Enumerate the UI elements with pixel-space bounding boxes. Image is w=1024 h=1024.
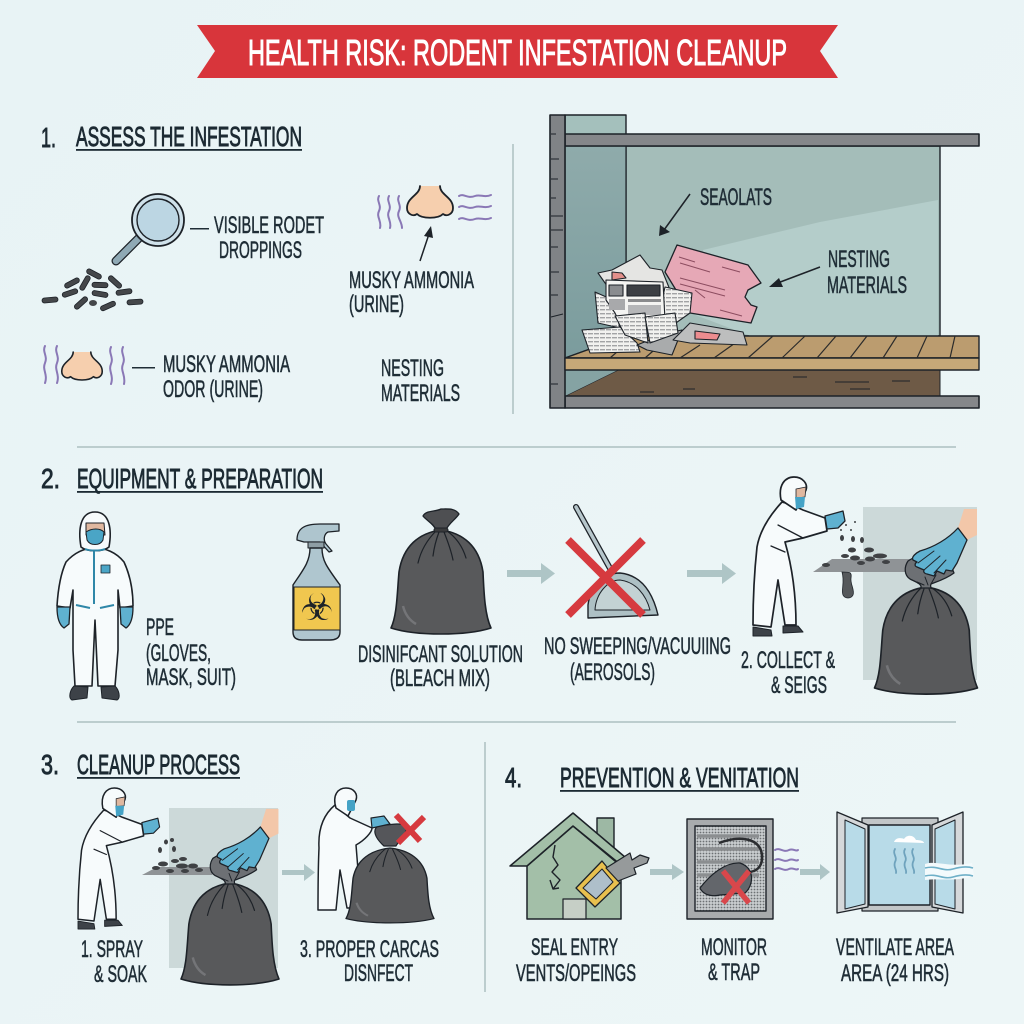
label: nesting materials: NESTING	[381, 355, 444, 382]
newspaper pile	[582, 255, 747, 355]
label: nesting materials: MATERIALS	[381, 380, 460, 407]
heading: assess the infestation	[41, 121, 302, 153]
label: visible droppings: VISIBLE RODET	[214, 212, 324, 239]
icon: house with cracks and sealing	[510, 813, 649, 919]
heading: prevention and ventilation	[505, 762, 799, 793]
label: proper carcass disinfect	[300, 936, 439, 987]
label: spray and soak	[81, 936, 147, 988]
icon: crossed-out dustpan	[568, 507, 658, 618]
label: ventilate area: AREA (24 HRS)	[841, 960, 949, 987]
label: monitor and trap: & TRAP	[708, 959, 760, 986]
label: PPE: MASK, SUIT)	[146, 664, 236, 691]
arrow: to nose	[420, 226, 433, 261]
label: visible droppings	[190, 212, 324, 264]
label: sealants with arrow	[659, 184, 772, 236]
wall and beams	[550, 115, 979, 408]
label: musky ammonia odor: MUSKY AMMONIA	[163, 351, 290, 378]
label: musky ammonia odor	[132, 351, 290, 403]
label: musky ammonia urine: MUSKY AMMONIA	[349, 267, 474, 294]
label: PPE: (GLOVES,	[146, 640, 211, 667]
label: musky ammonia urine: (URINE)	[349, 291, 404, 318]
icon: rat in trap cage	[687, 819, 773, 919]
arrow: spray to disposal	[282, 864, 315, 881]
arrow: house to trap	[650, 864, 684, 880]
label: musky ammonia odor: ODOR (URINE)	[163, 376, 263, 403]
heading: cleanup process: CLEANUP PROCESS	[77, 749, 240, 780]
label: no sweeping: (AEROSOLS)	[570, 659, 655, 686]
title banner	[197, 25, 838, 78]
label: monitor and trap	[701, 934, 767, 986]
illustration: collect droppings into bag	[753, 477, 978, 694]
heading: assess the infestation: 1.	[41, 122, 56, 153]
label: musky ammonia urine	[349, 267, 474, 318]
label: collect and seal: 2. COLLECT &	[741, 647, 835, 674]
label: visible droppings: DROPPINGS	[219, 237, 302, 264]
pink insulation paper	[665, 245, 761, 323]
label: nesting materials with arrow	[769, 246, 907, 299]
squiggles: trap odor	[775, 849, 798, 870]
panel: section 1 assess	[41, 121, 491, 407]
icon: open window	[837, 812, 974, 913]
label: seal entry	[516, 934, 636, 987]
icon: nose with odor, bottom left	[44, 346, 124, 384]
icon: spray bottle with biohazard label	[293, 524, 340, 640]
panel: section 4 prevention	[505, 762, 974, 987]
heading: equipment and preparation: 2.	[41, 463, 60, 494]
label: monitor and trap: MONITOR	[701, 934, 767, 961]
label: proper carcass disinfect: DISNFECT	[344, 960, 413, 987]
label: seal entry: VENTS/OPEINGS	[516, 960, 636, 987]
label: no sweeping: NO SWEEPING/VACUUIING	[544, 633, 731, 660]
label: spray and soak: & SOAK	[94, 961, 147, 988]
heading: prevention and ventilation: PREVENTION & VENITATION	[560, 762, 799, 793]
heading: cleanup process	[41, 749, 240, 780]
label: nesting materials with arrow: NESTING	[828, 246, 890, 273]
label: spray and soak: 1. SPRAY	[81, 936, 143, 963]
illustration: proper disposal with bag	[318, 788, 434, 923]
label: no sweeping	[544, 633, 731, 686]
label: disinfectant solution: (BLEACH MIX)	[390, 665, 490, 692]
label: nesting materials	[381, 355, 460, 407]
illustration: spray and soak	[78, 788, 279, 985]
label: PPE	[146, 614, 236, 691]
icon: rodent droppings	[42, 268, 143, 312]
arrow: dustpan to collect	[687, 563, 736, 584]
label: sealants with arrow: SEAOLATS	[700, 184, 772, 211]
icon: black garbage bag	[391, 509, 491, 634]
label: collect and seal	[741, 647, 835, 699]
icon: nose with odor, top right	[378, 186, 491, 228]
icon: magnifying glass	[116, 194, 184, 261]
arrow: bag to dustpan	[507, 563, 555, 584]
panel: section 3 cleanup	[41, 749, 439, 988]
label: nesting materials with arrow: MATERIALS	[827, 272, 907, 299]
icon: person in PPE suit	[57, 512, 133, 700]
label: disinfectant solution: DISINIFCANT SOLUTION	[358, 641, 523, 668]
heading: equipment and preparation: EQUIPMENT & PREPARATION	[77, 463, 323, 494]
label: seal entry: SEAL ENTRY	[531, 934, 618, 961]
wood floor	[565, 336, 979, 370]
label: PPE: PPE	[146, 614, 174, 641]
heading: cleanup process: 3.	[41, 749, 59, 780]
icon: spray bottle with biohazard label: ☣	[300, 586, 334, 629]
heading: prevention and ventilation: 4.	[505, 762, 522, 793]
illustration: wall cavity with nesting materials	[550, 115, 979, 408]
arrow: trap to window	[800, 864, 830, 880]
label: disinfectant solution	[358, 641, 523, 692]
label: collect and seal: & SEIGS	[771, 672, 827, 699]
panel: section 2 equipment	[41, 463, 978, 700]
heading: assess the infestation: ASSESS THE INFESTATION	[76, 121, 302, 152]
label: proper carcass disinfect: 3. PROPER CARCAS	[300, 936, 439, 963]
heading: equipment and preparation	[41, 463, 323, 494]
label: ventilate area	[836, 934, 954, 987]
